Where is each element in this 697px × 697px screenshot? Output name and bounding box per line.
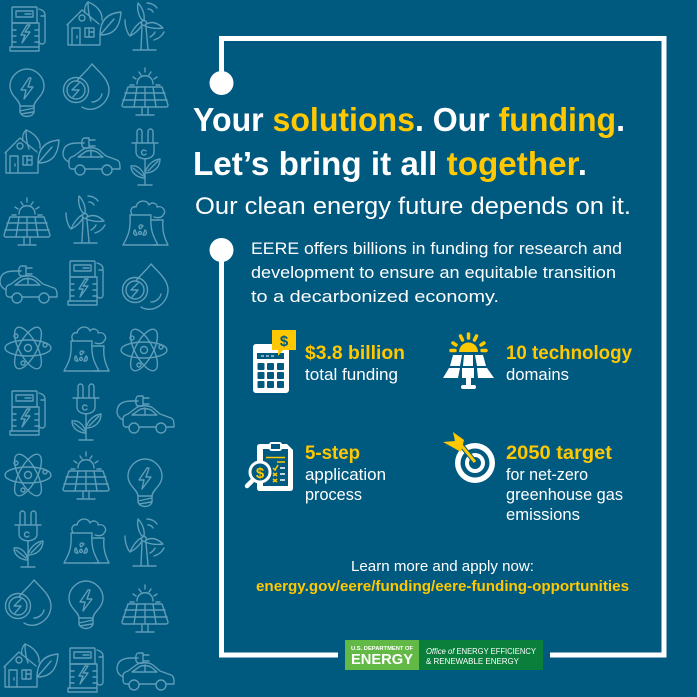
stat: 2050 target: 2050 target [506,443,613,464]
logo: U.S. Department of Energy [345,640,543,670]
stat: 2050 target [506,443,623,524]
frame dot: body [210,238,234,262]
stat: technology domains: domains [506,366,569,384]
icon: clipboard with magnifier [247,443,293,491]
stat: technology domains [506,343,632,384]
frame dot: top [210,71,234,95]
stat: 2050 target: emissions [506,506,580,524]
title: Your solutions. Our funding. [193,101,625,138]
subtitle: Our clean energy future depends on it. [195,193,631,220]
call to action: Learn more and apply now: [351,558,534,575]
stat: total funding [305,343,405,384]
stat: total funding: $3.8 billion [305,343,405,364]
icon: calculator with dollar bubble [253,330,296,393]
stat: total funding: total funding [305,366,398,384]
stat: application process: process [305,486,362,504]
icon: target with dart [443,432,495,483]
stat: application process [305,443,386,504]
logo: U.S. Department of Energy: & RENEWABLE ENERGY [426,657,520,666]
intro paragraph: development to ensure an equitable transition [251,263,616,282]
frame [222,38,664,655]
logo: U.S. Department of Energy: ENERGY [351,651,413,668]
icon: calculator with dollar bubble: $ [280,333,289,350]
intro paragraph: to a decarbonized economy. [251,287,499,306]
stat: application process: application [305,466,386,484]
stat: application process: 5-step [305,443,360,464]
title: Let’s bring it all together. [193,145,587,182]
title [193,101,625,182]
call to action [256,558,629,595]
logo: U.S. Department of Energy: U.S. DEPARTMENT OF [351,646,414,652]
stat: 2050 target: greenhouse gas [506,486,623,504]
logo: U.S. Department of Energy: Office of ENERGY EFFICIENCY [426,647,537,656]
intro paragraph [251,239,622,306]
stat: 2050 target: for net-zero [506,466,588,484]
icon pattern: clean energy icons [0,2,174,692]
intro paragraph: EERE offers billions in funding for research and [251,239,622,258]
stat: technology domains: 10 technology [506,343,632,364]
icon: clipboard with magnifier: $ [256,465,265,482]
call to action: energy.gov/eere/funding/eere-funding-opportunities [256,578,629,595]
icon: solar panel with sun [443,334,494,389]
